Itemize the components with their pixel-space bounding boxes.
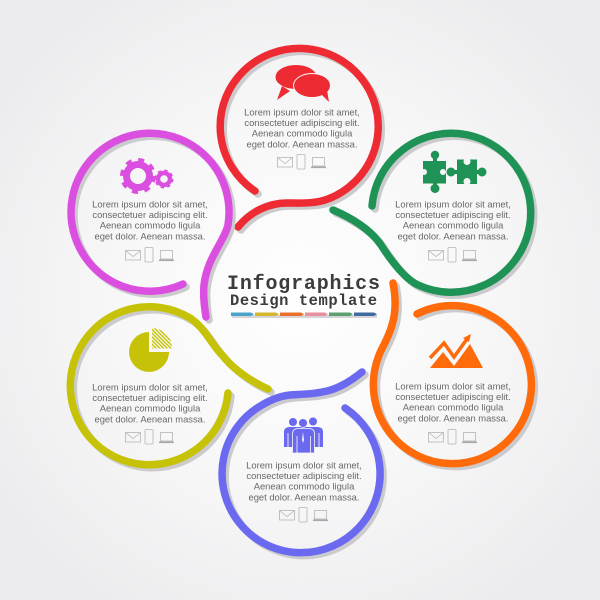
text: blue panel body: Lorem ipsum dolor sit amet, <box>246 460 362 470</box>
text: red panel body: eget dolor. Aenean massa. <box>246 138 358 149</box>
text: purple panel body: consectetuer adipiscing elit. <box>92 209 208 220</box>
text: green panel body: consectetuer adipiscing elit. <box>395 209 511 220</box>
panel: red speech bubble <box>220 48 381 230</box>
text: green panel body: eget dolor. Aenean massa. <box>397 230 509 241</box>
icon: devices <box>428 248 477 262</box>
panel: orange speech bubble <box>373 283 534 467</box>
text: purple panel body: Aenean commodo ligula <box>100 220 201 231</box>
icon: devices <box>278 154 326 169</box>
text: orange panel body: eget dolor. Aenean massa. <box>397 412 509 423</box>
icon: devices <box>126 248 174 262</box>
text: yellow panel body: Aenean commodo ligula <box>100 403 201 414</box>
icon: team of people <box>284 418 323 453</box>
text: yellow panel body: consectetuer adipiscing elit. <box>92 392 208 403</box>
icon: devices <box>126 430 174 444</box>
icon: gears <box>122 160 172 192</box>
text: red panel body: consectetuer adipiscing elit. <box>244 117 360 128</box>
colored arrow strip <box>231 312 377 318</box>
text: orange panel body: Lorem ipsum dolor sit amet, <box>395 380 511 392</box>
icon: chat bubbles <box>276 65 330 102</box>
icon: puzzle pieces <box>421 151 486 193</box>
text: red panel body: Lorem ipsum dolor sit amet, <box>244 106 360 118</box>
text: green panel body: Lorem ipsum dolor sit amet, <box>395 198 511 210</box>
text: purple panel body: eget dolor. Aenean massa. <box>94 230 206 241</box>
text: purple panel body: Lorem ipsum dolor sit amet, <box>92 198 208 210</box>
text: blue panel body: consectetuer adipiscing elit. <box>246 470 362 481</box>
title: Infographics <box>227 273 380 296</box>
text: blue panel body: eget dolor. Aenean massa. <box>248 491 360 502</box>
panel: yellow speech bubble <box>70 307 271 468</box>
panel: blue speech bubble <box>222 372 383 556</box>
panel: green speech bubble <box>333 133 534 295</box>
icon: devices <box>280 508 328 522</box>
text: red panel body: Aenean commodo ligula <box>252 128 353 139</box>
icon: devices <box>428 430 477 444</box>
text: green panel body: Aenean commodo ligula <box>403 220 504 231</box>
subtitle: Design template <box>230 292 377 310</box>
text: yellow panel body: Lorem ipsum dolor sit amet, <box>92 382 208 392</box>
text: yellow panel body: eget dolor. Aenean massa. <box>94 413 206 424</box>
icon: pie chart <box>129 328 172 372</box>
icon: growth chart <box>430 334 483 368</box>
text: orange panel body: Aenean commodo ligula <box>403 402 504 413</box>
text: blue panel body: Aenean commodo ligula <box>254 481 355 492</box>
text: orange panel body: consectetuer adipiscing elit. <box>395 391 511 402</box>
panel: purple speech bubble <box>71 133 232 320</box>
